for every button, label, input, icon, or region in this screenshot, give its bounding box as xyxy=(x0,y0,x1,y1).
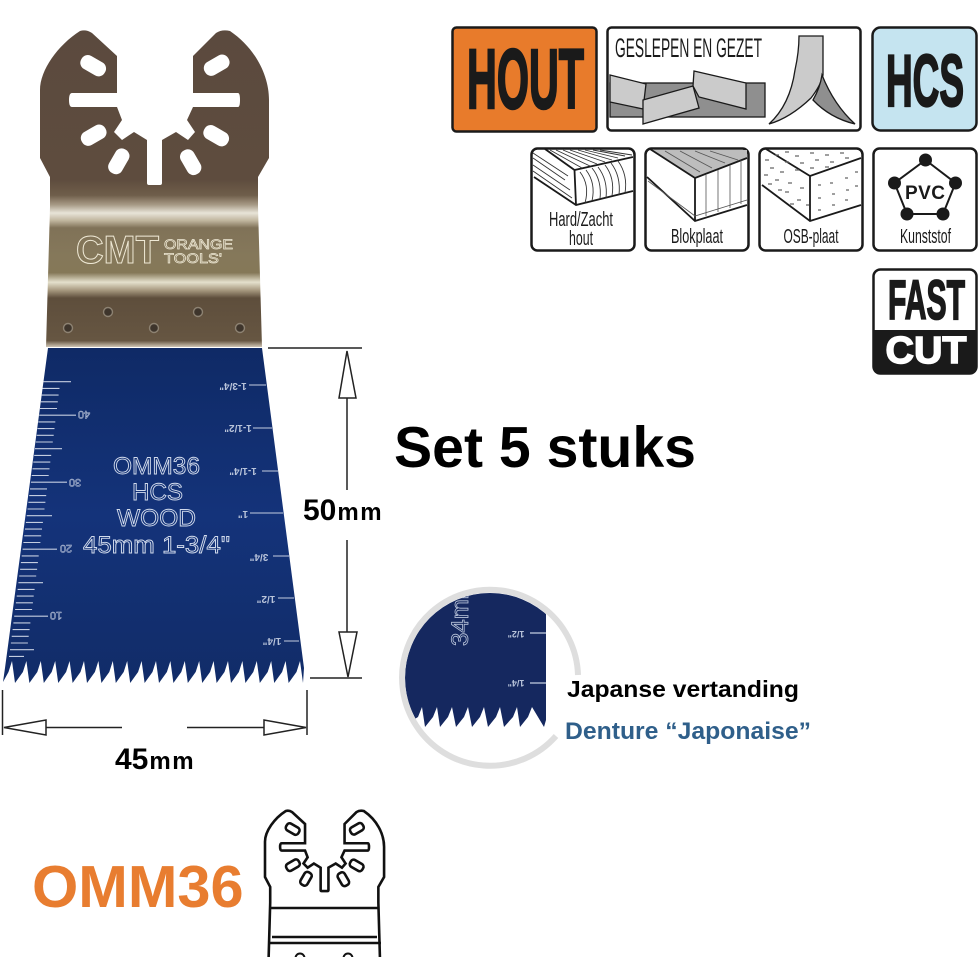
inset: tooth detail circle xyxy=(400,579,578,766)
inset blue blade close-up: 1/4" xyxy=(508,678,524,688)
inch scale labels: 1-3/4" xyxy=(219,380,247,391)
arrow: up xyxy=(339,351,356,398)
caption: Denture Japonaise: Denture “Japonaise” xyxy=(565,718,811,745)
icon: GESLEPEN EN GEZET xyxy=(608,28,860,130)
dimension: 50mm height xyxy=(268,348,383,678)
blue cutting blade with Japanese teeth xyxy=(3,348,304,683)
caption: Japanse vertanding: Japanse vertanding xyxy=(567,676,799,702)
rivets xyxy=(64,308,244,332)
blade engraved text: OMM36 xyxy=(113,453,200,480)
label: 45mm: 45mm xyxy=(115,743,195,776)
CMT logo: ORANGE xyxy=(164,236,233,252)
inch scale labels: 1-1/4" xyxy=(229,465,257,476)
icon: OSB-plaat: OSB-plaat xyxy=(784,226,839,248)
blade engraved text: HCS xyxy=(132,479,183,506)
icon: Blokplaat: Blokplaat xyxy=(671,226,723,248)
CMT logo: TOOLS' xyxy=(164,250,222,266)
inset ring xyxy=(402,590,578,766)
metric scale numbers: 30 xyxy=(69,476,81,488)
arrow: left xyxy=(4,720,46,735)
icon: FAST CUT xyxy=(873,268,977,374)
product code: OMM36: OMM36 xyxy=(32,853,244,920)
label: 50mm: 50mm xyxy=(303,494,383,527)
metric scale numbers: 10 xyxy=(50,609,62,621)
metric scale numbers: 20 xyxy=(60,542,72,554)
icon: GESLEPEN EN GEZET: GESLEPEN EN GEZET xyxy=(615,33,762,63)
metric scale numbers xyxy=(50,408,90,621)
blade engraved text xyxy=(83,453,230,559)
inch scale labels: 1/2" xyxy=(256,593,275,604)
inch scale labels: 1/4" xyxy=(262,635,281,646)
blade metal mounting plate xyxy=(40,30,269,347)
icon: FAST CUT: CUT xyxy=(886,330,966,372)
icon: HOUT xyxy=(452,28,596,132)
dimension: 45mm width xyxy=(2,690,307,776)
arrow: right xyxy=(264,720,306,735)
CMT logo xyxy=(76,229,233,272)
mounting slots xyxy=(78,52,232,178)
icon: Hard/Zacht hout: Hard/Zacht xyxy=(549,209,613,231)
icon: Hard/Zacht hout: hout xyxy=(569,228,593,250)
icon: OSB-plaat xyxy=(760,148,862,250)
icon: HOUT: HOUT xyxy=(467,32,584,126)
inch scale labels: 1" xyxy=(238,508,248,519)
inch scale labels: 3/4" xyxy=(249,551,268,562)
icon: PVC Kunststof xyxy=(874,148,976,250)
arrow: down xyxy=(339,632,357,677)
metric scale numbers: 40 xyxy=(78,408,90,420)
inset blue blade close-up: 34mm xyxy=(447,579,474,646)
icon: HCS xyxy=(872,28,976,130)
blade outline drawing xyxy=(265,811,384,975)
icon: Hard/Zacht hout xyxy=(532,148,634,250)
blade engraved text: WOOD xyxy=(117,505,196,532)
CMT logo: CMT xyxy=(76,229,159,272)
blade engraved text: 45mm 1-3/4" xyxy=(83,532,230,559)
inset blue blade close-up: 1/2" xyxy=(508,629,524,639)
teeth sketch xyxy=(610,36,855,124)
inch scale ticks xyxy=(249,385,299,641)
icon: PVC Kunststof: PVC xyxy=(905,183,945,204)
heading: Set 5 stuks: Set 5 stuks xyxy=(394,416,696,480)
metric scale ticks xyxy=(9,382,76,656)
product photo: oscillating saw blade xyxy=(3,30,304,683)
inset blue blade close-up xyxy=(405,593,546,727)
inch scale labels xyxy=(219,380,281,646)
icon: Blokplaat xyxy=(646,148,748,250)
inch scale labels: 1-1/2" xyxy=(224,422,252,433)
